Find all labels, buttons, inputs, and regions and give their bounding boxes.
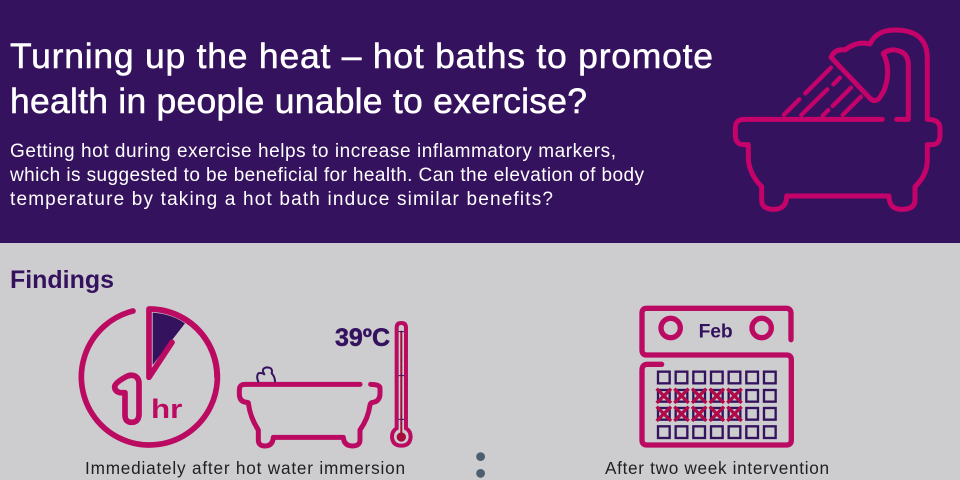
title: health in people unable to exercise? xyxy=(10,81,587,121)
title: Turning up the heat – hot baths to promote xyxy=(10,36,713,76)
clock face and hand xyxy=(81,309,217,445)
numeral 1 xyxy=(115,375,139,422)
divider dots xyxy=(476,452,485,478)
caption: immediately after: Immediately after hot water immersion xyxy=(85,458,405,478)
month label: Feb xyxy=(699,322,733,343)
intro text: temperature by taking a hot bath induce similar benefits? xyxy=(10,189,553,210)
calendar rings xyxy=(661,318,771,338)
thermometer outline xyxy=(392,323,411,446)
intro text: Getting hot during exercise helps to increase inflammatory markers, xyxy=(10,141,616,162)
intro text: which is suggested to be beneficial for health. Can the elevation of body xyxy=(9,165,644,186)
bath tub xyxy=(239,384,380,446)
icon: bath with shower xyxy=(735,30,940,209)
icon: thermometer xyxy=(392,323,411,446)
icon: calendar xyxy=(642,308,791,445)
title xyxy=(10,36,713,121)
icon: one hour clock xyxy=(81,309,217,445)
clock wedge fill xyxy=(153,313,185,365)
label: hr: hr xyxy=(151,394,182,424)
heading: findings: Findings xyxy=(10,266,114,294)
intro text xyxy=(9,141,644,210)
label: 39 degrees: 39ºC xyxy=(335,324,390,352)
duck xyxy=(257,367,275,382)
panel: header xyxy=(0,0,960,243)
crossed-off days xyxy=(657,389,742,421)
calendar frame xyxy=(642,308,791,445)
icon: small bath with duck xyxy=(239,367,380,446)
caption: after two weeks: After two week intervention xyxy=(605,458,829,478)
date grid xyxy=(658,372,776,438)
